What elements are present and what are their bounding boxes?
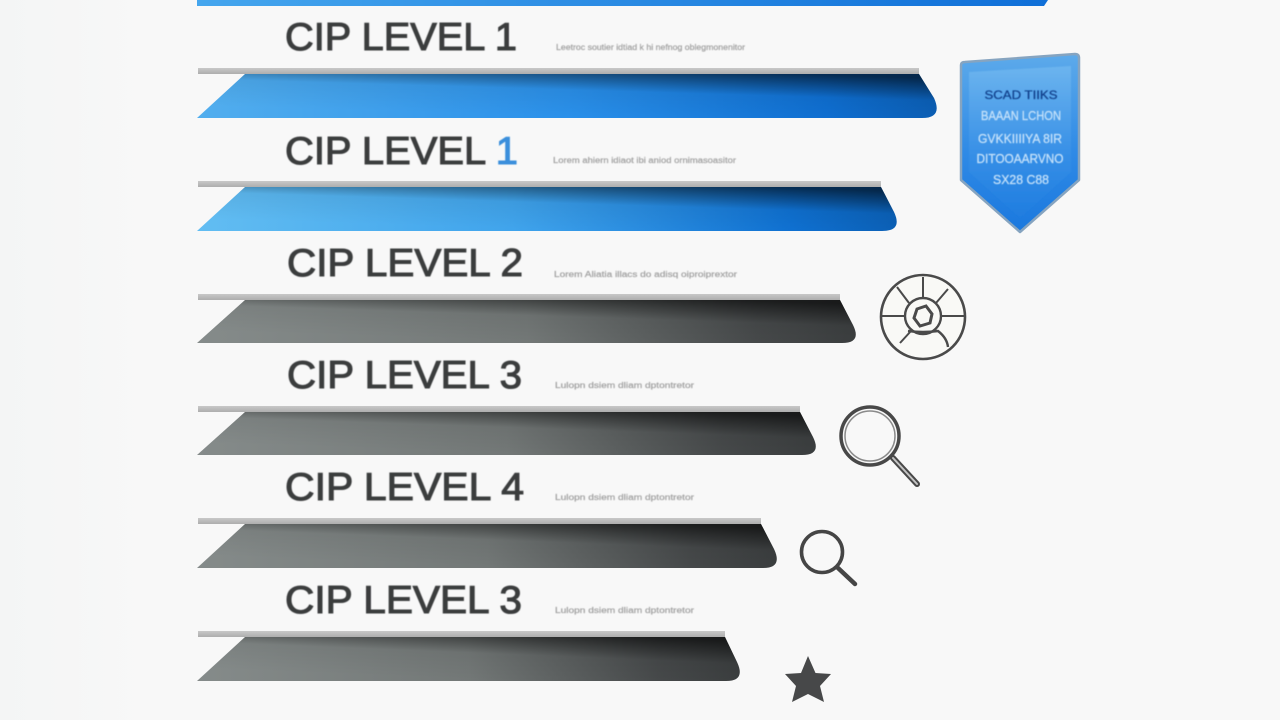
description text: Lulopn dsiem dliam dptontretor <box>555 606 694 615</box>
callout: blue shield badge: SCAD TIIKS <box>984 88 1058 102</box>
grey bar <box>197 300 856 343</box>
row 1: CIP Level 1 <box>197 16 937 118</box>
heading: CIP LEVEL 4: CIP LEVEL 4 <box>285 466 524 509</box>
blue bar <box>197 74 937 118</box>
heading: CIP LEVEL 2: CIP LEVEL 2 <box>287 242 523 285</box>
description text: Lulopn dsiem dliam dptontretor <box>555 493 694 502</box>
grey bar <box>197 412 816 455</box>
blue bar <box>197 187 897 231</box>
description text: Lorem ahiern idiaot ibi aniod ornimasoasitor <box>553 156 736 165</box>
grey divider <box>198 406 800 412</box>
grey divider <box>198 631 725 637</box>
grey divider <box>198 181 881 187</box>
grey divider <box>198 68 919 74</box>
icon: small magnifying glass <box>802 532 855 584</box>
row 5: CIP Level 4 <box>197 466 777 568</box>
icon: target wheel <box>881 275 965 359</box>
row 6: CIP Level 3 <box>197 579 740 681</box>
grey bar <box>197 637 740 681</box>
row 3: CIP Level 2 <box>197 242 856 343</box>
heading: CIP LEVEL 1: CIP LEVEL 1 <box>285 16 517 59</box>
callout: blue shield badge: DITOOAARVNO <box>976 152 1064 166</box>
grey bar <box>197 524 777 568</box>
grey divider <box>198 518 761 524</box>
callout: blue shield badge: SX28 C88 <box>993 173 1049 187</box>
description text: Lorem Aliatia illacs do adisq oiproiprextor <box>554 270 737 279</box>
grey divider <box>198 294 840 300</box>
callout: blue shield badge: GVKKIIIIYA 8IR <box>978 132 1062 146</box>
callout: blue shield badge <box>961 54 1079 232</box>
description text: Leetroc soutier idtiad k hi nefnog oblegmonenitor <box>556 43 745 52</box>
heading: CIP LEVEL 3: CIP LEVEL 3 <box>285 579 522 622</box>
row 4: CIP Level 3 <box>197 354 816 455</box>
description text: Lulopn dsiem dliam dptontretor <box>555 381 694 390</box>
heading: CIP LEVEL 1: CIP LEVEL 1 <box>285 130 518 173</box>
icon: star <box>785 656 831 702</box>
icon: large magnifying glass <box>841 407 917 484</box>
top bar: partially visible blue bar <box>197 0 1048 6</box>
callout: blue shield badge: BAAAN LCHON <box>981 109 1061 123</box>
heading: CIP LEVEL 3: CIP LEVEL 3 <box>287 354 522 397</box>
row 2: CIP Level 1 with blue numeral <box>197 130 897 231</box>
